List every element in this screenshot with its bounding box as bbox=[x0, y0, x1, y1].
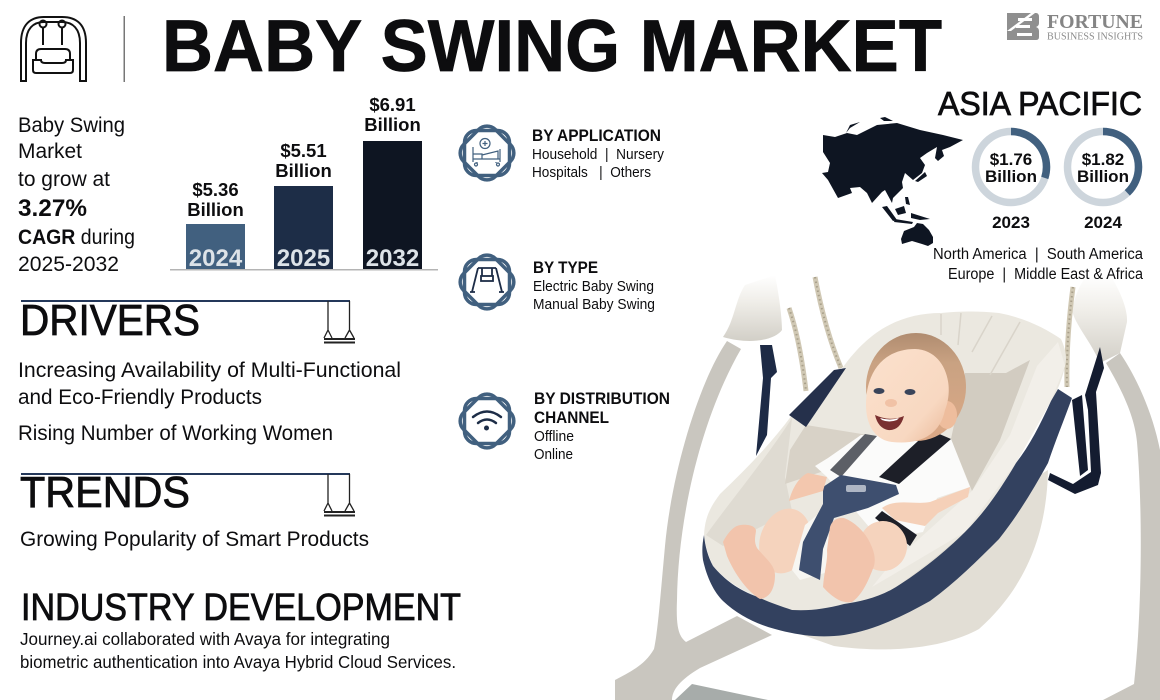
donut chart: 2024 bbox=[1068, 132, 1138, 232]
CAGR summary text bbox=[18, 114, 135, 276]
baby head bbox=[866, 333, 966, 443]
swing frame left bbox=[615, 341, 772, 700]
segment: by application bbox=[455, 121, 665, 185]
segment: by distribution channel: CHANNEL bbox=[534, 408, 609, 427]
waist strap bbox=[875, 511, 917, 546]
segment: by application: Household | Nursery bbox=[532, 147, 665, 163]
panel: drivers: and Eco-Friendly Products bbox=[18, 386, 262, 409]
seat shell bbox=[760, 470, 1048, 649]
bar chart: market size: Billion bbox=[364, 114, 421, 135]
bar chart: market size: 2032 bbox=[366, 245, 419, 272]
top clamp right bbox=[1072, 275, 1127, 363]
logo: Fortune Business Insights: FORTUNE bbox=[1047, 11, 1143, 33]
right bolster bbox=[872, 342, 1065, 587]
inner seat shading bbox=[785, 425, 868, 484]
bar chart: market size: $5.51 bbox=[280, 140, 327, 161]
straps bbox=[756, 345, 777, 456]
legs bbox=[751, 502, 819, 580]
logo: Fortune Business Insights: BUSINESS INSIGHTS bbox=[1047, 32, 1143, 42]
segment: by distribution channel: Offline bbox=[534, 429, 574, 445]
swing base bbox=[675, 684, 768, 700]
seat cushion bbox=[704, 312, 1066, 610]
bar chart: market size: 2025 bbox=[277, 245, 330, 272]
bar chart: market size: $6.91 bbox=[369, 94, 416, 115]
CAGR summary text: CAGR during bbox=[18, 226, 135, 249]
top clamp left bbox=[723, 275, 782, 341]
rope twist bbox=[789, 277, 1073, 391]
harness panel bbox=[799, 475, 899, 580]
seat back channels bbox=[941, 313, 1020, 375]
left navy strip bbox=[789, 368, 846, 427]
baby arms bbox=[789, 473, 827, 501]
bar chart: market size: Billion bbox=[187, 199, 244, 220]
seat navy rim bbox=[702, 389, 1072, 636]
baby feet bbox=[723, 525, 775, 599]
panel: industry development: Journey.ai collaborated with Avaya for integrating bbox=[20, 629, 390, 649]
segment: by type: BY TYPE bbox=[533, 258, 598, 277]
segment: by type: Manual Baby Swing bbox=[533, 297, 655, 313]
segment: by distribution channel: Online bbox=[534, 447, 573, 463]
bar chart: market size: 2024 bbox=[189, 245, 243, 272]
other regions text: North America | South America bbox=[933, 246, 1143, 263]
CAGR summary text: 2025-2032 bbox=[18, 253, 119, 276]
panel: drivers bbox=[18, 296, 401, 445]
bar chart: market size bbox=[170, 94, 438, 272]
panel: drivers: Increasing Availability of Multi-Functional bbox=[18, 359, 401, 382]
segment: by application: Hospitals | Others bbox=[532, 165, 651, 181]
ropes bbox=[789, 277, 1073, 391]
onesie bbox=[815, 435, 970, 540]
donut chart: 2024: 2024 bbox=[1084, 213, 1122, 232]
panel: drivers: Rising Number of Working Women bbox=[18, 422, 333, 445]
header swing icon bbox=[21, 17, 86, 81]
other regions text: Europe | Middle East & Africa bbox=[948, 266, 1143, 283]
donut chart: 2023: 2023 bbox=[992, 213, 1030, 232]
donut chart: 2023: Billion bbox=[985, 167, 1037, 186]
CAGR summary text: Baby Swing bbox=[18, 114, 125, 137]
bar chart: market size: $5.36 bbox=[192, 179, 239, 200]
donut chart: 2023: $1.76 bbox=[990, 150, 1032, 169]
panel: trends: Growing Popularity of Smart Products bbox=[20, 528, 369, 551]
CAGR summary text: Market bbox=[18, 140, 82, 163]
segment: by type: Electric Baby Swing bbox=[533, 279, 654, 295]
map: Asia Pacific bbox=[822, 117, 963, 246]
panel: trends bbox=[20, 468, 369, 551]
bar chart: market size: Billion bbox=[275, 160, 332, 181]
panel: industry development: INDUSTRY DEVELOPMENT bbox=[21, 587, 461, 629]
logo: Fortune Business Insights bbox=[1007, 11, 1143, 42]
panel: industry development: biometric authentication into Avaya Hybrid Cloud Services. bbox=[20, 652, 456, 672]
panel: industry development bbox=[20, 587, 461, 672]
harness straps bbox=[830, 434, 877, 477]
diaper bbox=[792, 510, 835, 580]
donut chart: 2024: Billion bbox=[1077, 167, 1129, 186]
segment: by application: BY APPLICATION bbox=[532, 126, 661, 145]
illustration: baby in swing bbox=[615, 275, 1160, 700]
swing frame right bbox=[1103, 353, 1160, 700]
CAGR summary text: 3.27% bbox=[18, 195, 87, 222]
segment: by distribution channel bbox=[455, 389, 670, 463]
shadow behind head bbox=[951, 360, 1030, 491]
CAGR summary text: to grow at bbox=[18, 168, 110, 191]
title: BABY SWING MARKET bbox=[162, 6, 942, 87]
segment: by type bbox=[455, 250, 655, 314]
donut chart: 2024: $1.82 bbox=[1082, 150, 1124, 169]
panel: drivers: DRIVERS bbox=[20, 296, 200, 345]
segment: by distribution channel: BY DISTRIBUTION bbox=[534, 389, 670, 408]
header divider bbox=[124, 16, 125, 82]
left wing shading bbox=[706, 418, 792, 546]
donut chart: 2023 bbox=[976, 132, 1046, 232]
region heading: Asia Pacific: ASIA PACIFIC bbox=[938, 86, 1142, 123]
other regions text bbox=[933, 246, 1143, 283]
panel: trends: TRENDS bbox=[20, 468, 190, 517]
